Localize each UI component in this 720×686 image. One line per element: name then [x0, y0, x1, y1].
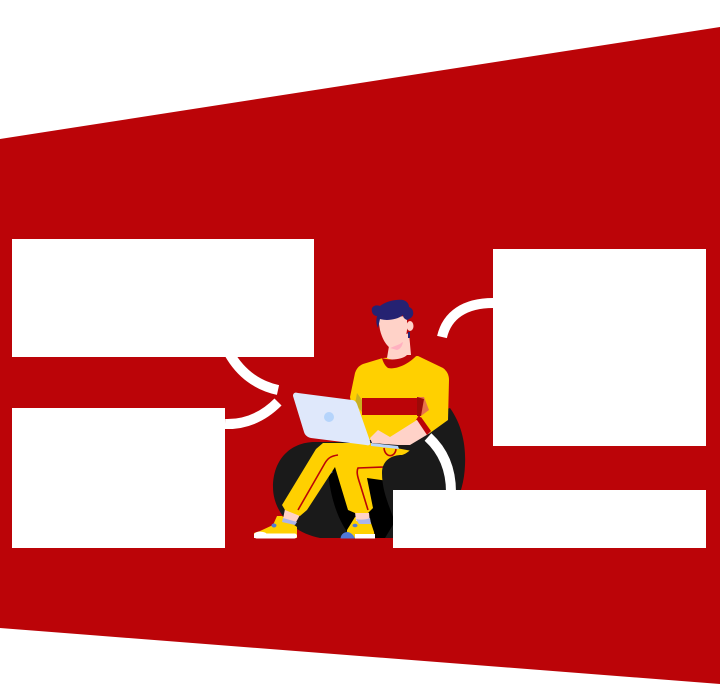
forearm and hand	[370, 417, 431, 445]
panel: bottom right	[393, 490, 706, 548]
ankles	[282, 509, 371, 525]
connector arcs	[225, 303, 493, 424]
laptop	[293, 393, 399, 449]
white arc over beanbag	[428, 437, 451, 492]
trousers	[282, 443, 412, 516]
panel: bottom left	[12, 408, 225, 548]
beanbag front	[382, 437, 453, 538]
beanbag back	[273, 408, 465, 538]
sweater	[350, 356, 449, 440]
panel: top left	[12, 239, 314, 357]
panel: top right	[493, 249, 706, 446]
shoes	[254, 516, 375, 540]
neck and head	[372, 300, 417, 368]
illustration: person with laptop on beanbag	[254, 300, 465, 540]
